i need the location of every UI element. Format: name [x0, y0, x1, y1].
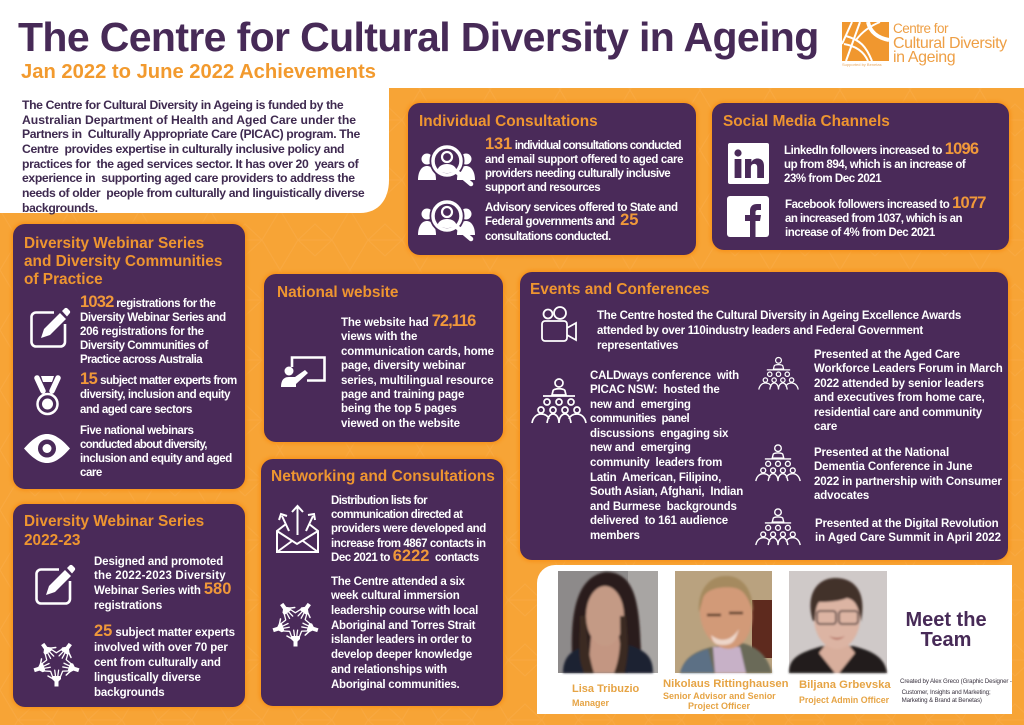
- logo text: Centre for: [893, 21, 948, 36]
- experts text: diversity, inclusion and equity: [80, 389, 230, 401]
- distribution lists text: providers were developed and: [331, 523, 486, 535]
- registrations text: the 2022-2023 Diversity: [94, 570, 226, 582]
- panel: meet the team: [537, 565, 1012, 714]
- workforce forum text: and executives from home care,: [814, 392, 985, 404]
- awards text: attended by over 110industry leaders and Federal Government: [597, 324, 923, 336]
- digital revolution text: [815, 518, 1001, 544]
- icon: people search: [418, 200, 475, 242]
- photo: Lisa Tribuzio: [558, 571, 658, 673]
- registrations text: 206 registrations for the: [80, 326, 204, 338]
- caldways text: [590, 370, 743, 542]
- website text: The website had 72,116: [341, 312, 475, 330]
- intro text block: practices for the aged services sector. It has over 20 years of: [22, 157, 358, 171]
- icon: pencil: [35, 564, 76, 605]
- awards text: The Centre hosted the Cultural Diversity in Ageing Excellence Awards: [597, 310, 961, 322]
- experts text: backgrounds: [94, 686, 165, 698]
- heading: Diversity Webinar Series: [24, 513, 204, 530]
- caldways text: new and emerging: [590, 442, 691, 454]
- heading: 2022-23: [24, 532, 80, 549]
- website text: page, diversity webinar: [341, 360, 465, 372]
- panel: networking and consultations: [261, 459, 503, 706]
- icon: audience: [531, 378, 587, 424]
- experts text: 25 subject matter experts: [94, 622, 235, 640]
- logo text: [893, 21, 1008, 66]
- icon: presenter: [281, 356, 326, 387]
- registrations text: Practice across Australia: [80, 354, 202, 366]
- workforce forum text: [814, 349, 1003, 433]
- registrations text: Designed and promoted: [94, 556, 223, 568]
- icon: audience: [758, 356, 799, 390]
- experts text: lingustically diverse: [94, 672, 201, 684]
- experts text: [80, 370, 237, 416]
- distribution lists text: [331, 495, 486, 565]
- consultations text: and email support offered to aged care: [485, 154, 683, 166]
- experts text: [94, 622, 235, 698]
- icon: audience: [755, 444, 801, 482]
- registrations text: Webinar Series with 580: [94, 580, 231, 598]
- title: The Centre for Cultural Diversity in Ageing: [18, 14, 819, 60]
- consultations text: providers needing culturally inclusive: [485, 168, 670, 180]
- experts text: cent from culturally and: [94, 656, 221, 668]
- advisory text: Federal governments and 25: [485, 211, 638, 229]
- facebook text: increase of 4% from Dec 2021: [785, 227, 935, 239]
- registrations text: [80, 293, 226, 366]
- leadership course text: Aboriginal communities.: [331, 679, 459, 691]
- dementia conference text: Presented at the National: [814, 447, 949, 459]
- intro text block: The Centre for Cultural Diversity in Ageing is funded by the: [22, 98, 343, 112]
- icon: hands: [34, 642, 80, 686]
- meet the team heading: Team: [921, 629, 971, 651]
- advisory text: Advisory services offered to State and: [485, 202, 678, 214]
- website text: being the top 5 pages: [341, 403, 457, 415]
- consultations text: 131 individual consultations conducted: [485, 135, 681, 153]
- workforce forum text: 2022 attended by senior leaders: [814, 378, 984, 390]
- digital revolution text: in Aged Care Summit in April 2022: [815, 532, 1001, 544]
- leadership course text: week cultural immersion: [331, 590, 459, 602]
- caption: Lisa: Lisa Tribuzio: [572, 683, 639, 695]
- caption: Biljana: Biljana Grbevska: [799, 679, 891, 691]
- intro text block: backgrounds.: [22, 201, 98, 215]
- intro text block: Centre provides expertise in culturally inclusive policy and: [22, 142, 344, 156]
- workforce forum text: Workforce Leaders Forum in March: [814, 363, 1003, 375]
- awards text: representatives: [597, 340, 678, 352]
- heading: Networking and Consultations: [271, 468, 495, 485]
- national webinars text: inclusion and equity and aged: [80, 453, 232, 465]
- heading: Diversity Webinar Series: [24, 235, 204, 252]
- leadership course text: Aboriginal and Torres Strait: [331, 620, 475, 632]
- panel: events and conferences: [520, 272, 1008, 560]
- experts text: 15 subject matter experts from: [80, 370, 237, 388]
- icon: video camera: [541, 306, 577, 342]
- photo: Nikolaus Rittinghausen: [675, 571, 772, 673]
- distribution lists text: Distribution lists for: [331, 495, 427, 507]
- icon: pencil: [30, 308, 70, 348]
- consultations text: support and resources: [485, 182, 600, 194]
- caldways text: new and emerging: [590, 399, 691, 411]
- designer credit: [900, 678, 1012, 705]
- role: Nikolaus: [663, 692, 775, 711]
- icon: audience: [755, 508, 801, 546]
- intro text block: needs of older people from culturally and linguistically diverse: [22, 186, 364, 200]
- intro text block: Partners in Culturally Appropriate Care (PICAC) program. The: [22, 127, 360, 141]
- leadership course text: [331, 576, 478, 691]
- advisory text: [485, 202, 678, 243]
- role: Lisa: Manager: [572, 698, 609, 708]
- national webinars text: conducted about diversity,: [80, 439, 207, 451]
- caldways text: delivered to 161 audience: [590, 515, 728, 527]
- digital revolution text: Presented at the Digital Revolution: [815, 518, 998, 530]
- caption: Nikolaus: Nikolaus Rittinghausen: [663, 678, 789, 690]
- icon: linkedin: [728, 143, 769, 184]
- website text: page and training page: [341, 389, 464, 401]
- experts text: involved with over 70 per: [94, 642, 228, 654]
- subtitle: Jan 2022 to June 2022 Achievements: [21, 61, 376, 83]
- leadership course text: islander leaders in order to: [331, 634, 472, 646]
- heading: Social Media Channels: [723, 113, 890, 130]
- caldways text: community leaders from: [590, 457, 722, 469]
- workforce forum text: residential care and community: [814, 407, 982, 419]
- logo text: in Ageing: [893, 49, 955, 66]
- heading: of Practice: [24, 271, 103, 288]
- experts text: and aged care sectors: [80, 404, 192, 416]
- national webinars text: [80, 425, 232, 479]
- website text: communication cards, home: [341, 346, 494, 358]
- icon: envelope: [276, 504, 319, 553]
- linkedin text: up from 894, which is an increase of: [784, 159, 965, 171]
- consultations text: [485, 135, 684, 194]
- panel: social media channels: [712, 103, 1009, 250]
- meet the team heading: [886, 610, 1006, 650]
- dementia conference text: advocates: [814, 490, 869, 502]
- icon: people search: [418, 145, 475, 186]
- dementia conference text: [814, 447, 1002, 502]
- linkedin text: 23% from Dec 2021: [784, 173, 881, 185]
- registrations text: [94, 556, 231, 612]
- caldways text: and Burmese backgrounds: [590, 501, 737, 513]
- heading: Individual Consultations: [419, 113, 598, 130]
- designer credit: Marketing & Brand at Benetas): [902, 697, 982, 704]
- panel: national website: [264, 274, 503, 442]
- leadership course text: and relationships with: [331, 664, 447, 676]
- website text: [341, 312, 494, 430]
- website text: viewed on the website: [341, 418, 460, 430]
- dementia conference text: 2022 in partnership with Consumer: [814, 476, 1002, 488]
- caldways text: PICAC NSW: hosted the: [590, 384, 720, 396]
- logo: [842, 21, 1008, 67]
- distribution lists text: Dec 2021 to 6222 contacts: [331, 547, 479, 565]
- dementia conference text: Dementia Conference in June: [814, 461, 972, 473]
- role: Biljana: Project Admin Officer: [799, 695, 889, 705]
- icon: facebook: [727, 196, 769, 237]
- advisory text: consultations conducted.: [485, 231, 611, 243]
- panel: diversity webinar series 2022-23: [13, 504, 245, 707]
- national webinars text: Five national webinars: [80, 425, 193, 437]
- intro text block: Australian Department of Health and Aged Care under the: [22, 113, 356, 127]
- facebook text: Facebook followers increased to 1077: [785, 194, 986, 212]
- registrations text: registrations: [94, 600, 162, 612]
- national webinars text: care: [80, 467, 102, 479]
- leadership course text: leadership course with local: [331, 605, 478, 617]
- panel: individual consultations: [408, 103, 696, 255]
- linkedin text: LinkedIn followers increased to 1096: [784, 140, 978, 158]
- leadership course text: develop deeper knowledge: [331, 649, 472, 661]
- meet the team heading: Meet the: [905, 609, 987, 631]
- photo: Biljana Grbevska: [789, 571, 887, 673]
- icon: eye: [24, 434, 70, 463]
- distribution lists text: increase from 4867 contacts in: [331, 538, 486, 550]
- caldways text: South Asian, Afghani, Indian: [590, 486, 743, 498]
- role: Nikolaus: Senior Advisor and Senior: [663, 691, 776, 701]
- panel: diversity webinar series and communities of practice: [13, 224, 245, 489]
- registrations text: 1032 registrations for the: [80, 293, 215, 311]
- heading: Events and Conferences: [530, 281, 710, 298]
- awards text: [597, 310, 961, 352]
- website text: series, multilingual resource: [341, 375, 493, 387]
- heading: [24, 235, 222, 288]
- leadership course text: The Centre attended a six: [331, 576, 465, 588]
- facebook text: [785, 194, 986, 239]
- intro text block: [22, 98, 364, 215]
- caldways text: discussions engaging six: [590, 428, 728, 440]
- heading: and Diversity Communities: [24, 253, 222, 270]
- logo strapline: Supported by Benetas: [842, 62, 882, 67]
- heading: [24, 513, 204, 549]
- website text: views with the: [341, 331, 417, 343]
- workforce forum text: care: [814, 421, 837, 433]
- logo mark: [842, 22, 889, 61]
- caldways text: members: [590, 530, 640, 542]
- heading: National website: [277, 284, 398, 301]
- icon: hands: [272, 602, 318, 646]
- registrations text: Diversity Communities of: [80, 340, 208, 352]
- logo text: Cultural Diversity: [893, 34, 1007, 52]
- role: Nikolaus: Project Officer: [688, 700, 750, 710]
- workforce forum text: Presented at the Aged Care: [814, 349, 960, 361]
- distribution lists text: communication directed at: [331, 509, 462, 521]
- designer credit: Customer, Insights and Marketing;: [902, 689, 991, 696]
- caldways text: communities panel: [590, 413, 689, 425]
- linkedin text: [784, 140, 978, 185]
- registrations text: Diversity Webinar Series and: [80, 312, 226, 324]
- caldways text: CALDways conference with: [590, 370, 739, 382]
- facebook text: an increased from 1037, which is an: [785, 213, 962, 225]
- caldways text: Latin American, Filipino,: [590, 472, 721, 484]
- icon: medal: [34, 375, 61, 416]
- intro text block: experience in supporting aged care providers to address the: [22, 171, 355, 185]
- designer credit: Created by Alex Greco (Graphic Designer -: [900, 678, 1012, 685]
